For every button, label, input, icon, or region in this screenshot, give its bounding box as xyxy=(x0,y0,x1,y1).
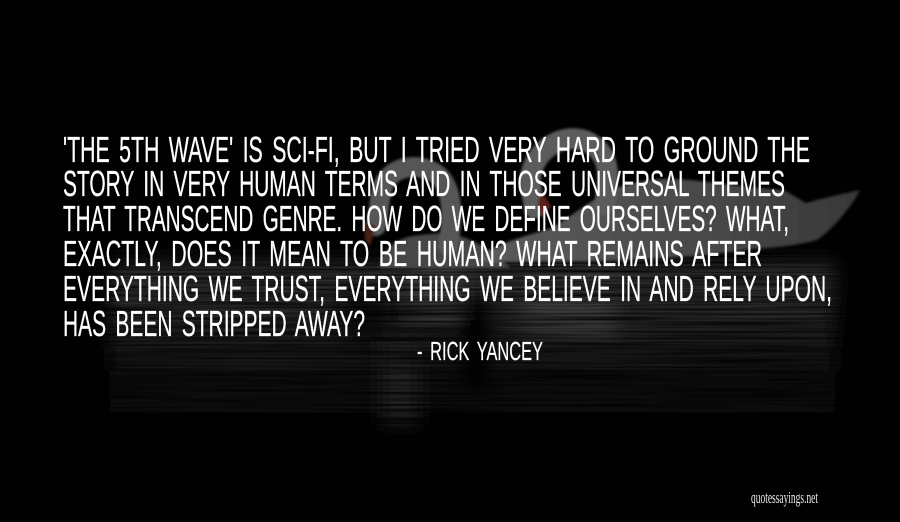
swan reflections xyxy=(340,265,615,425)
quote text xyxy=(63,129,832,344)
quote text: HAS BEEN STRIPPED AWAY? xyxy=(63,303,365,344)
right swan neck xyxy=(530,139,608,208)
right swan body xyxy=(478,179,860,262)
left swan beak xyxy=(364,222,376,246)
right swan beak xyxy=(538,190,551,218)
right swan xyxy=(478,139,860,262)
left swan xyxy=(364,167,510,268)
left swan body xyxy=(380,232,510,268)
attribution: - RICK YANCEY xyxy=(417,336,543,366)
watermark: quotessayings.net xyxy=(751,488,818,507)
dark water xyxy=(80,252,860,442)
water ripples xyxy=(80,252,860,442)
left swan neck xyxy=(376,167,451,245)
